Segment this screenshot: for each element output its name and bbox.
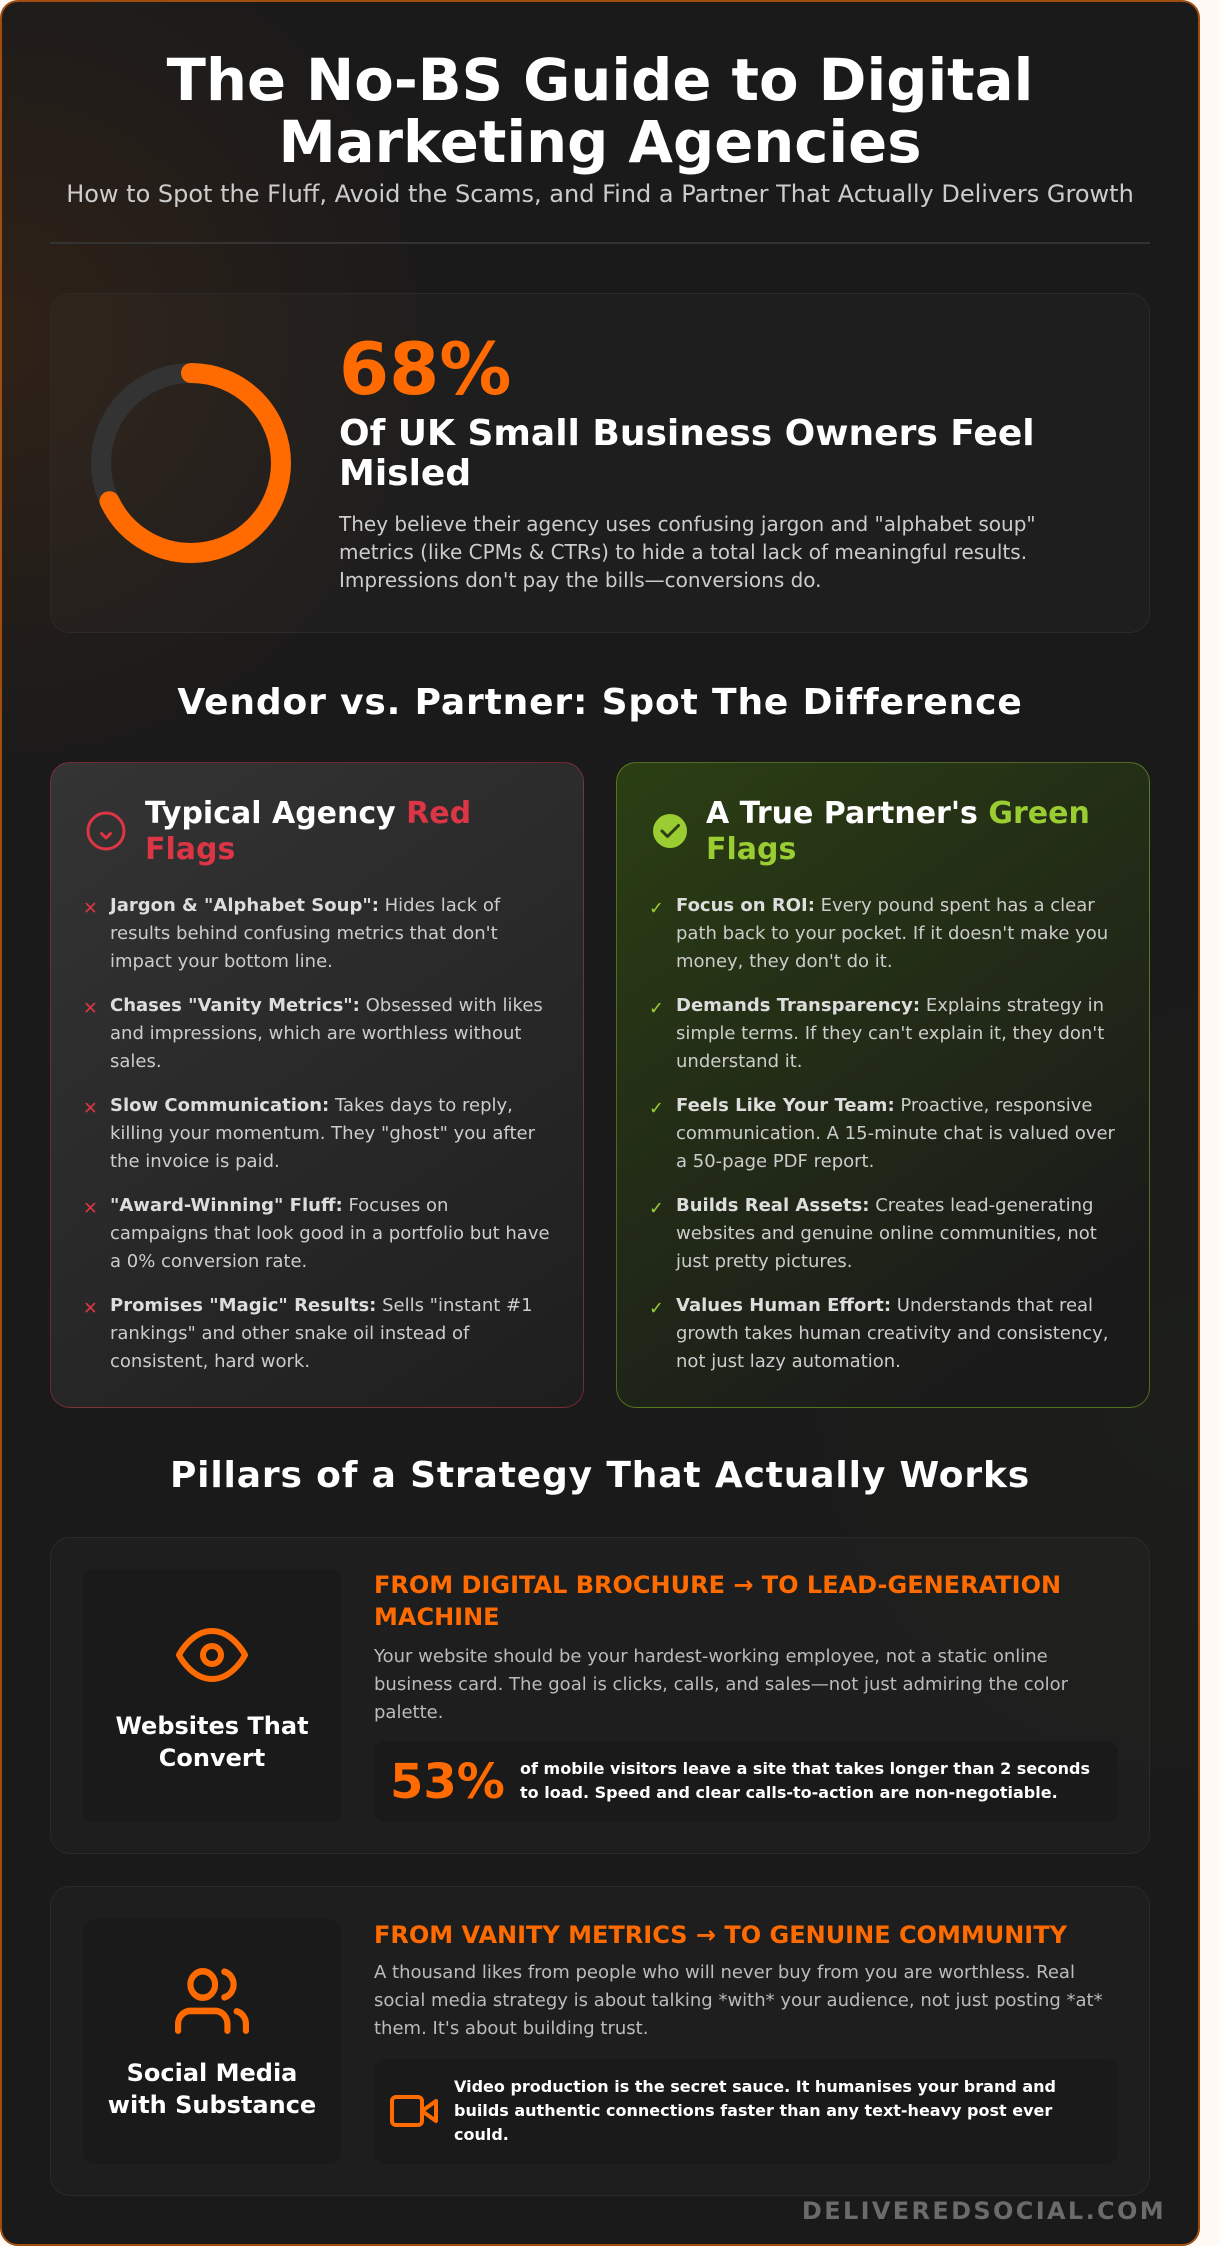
title: [166, 47, 1033, 176]
pillar description: them. It's about building trust.: [374, 2018, 648, 2039]
hero heading: [339, 413, 1035, 494]
pillar description: social media strategy is about talking *with* your audience, not just posting *at*: [374, 1990, 1103, 2011]
label: Social Media: [127, 2059, 297, 2087]
list item: and impressions, which are worthless without: [110, 1023, 521, 1044]
heading: red flags: Flags: [145, 832, 235, 867]
list item: ✓: [649, 899, 664, 919]
stat text: [520, 1759, 1090, 1802]
label: [108, 2059, 316, 2119]
list item: results behind confusing metrics that don't: [110, 923, 498, 944]
pillar description: [374, 1962, 1103, 2039]
heading: red flags: Typical Agency Red: [145, 796, 471, 831]
list item: [649, 1095, 1115, 1172]
list: green flags: [649, 895, 1115, 1372]
list item: [83, 1295, 533, 1372]
list item: Slow Communication: Takes days to reply,: [110, 1095, 513, 1116]
hero heading: Of UK Small Business Owners Feel: [339, 413, 1035, 454]
list item: understand it.: [676, 1051, 803, 1072]
pillar heading: [374, 1571, 1061, 1631]
panel: 68% statistic hero: [50, 293, 1150, 633]
section heading: vendor vs partner: Vendor vs. Partner: Spot The Difference: [177, 682, 1023, 723]
heading: green flags: A True Partner's Green: [706, 796, 1090, 831]
list item: "Award-Winning" Fluff: Focuses on: [110, 1195, 448, 1216]
stat text: to load. Speed and clear calls-to-action are non-negotiable.: [520, 1783, 1058, 1802]
subtitle: How to Spot the Fluff, Avoid the Scams, and Find a Partner That Actually Delivers Growth: [66, 180, 1134, 208]
callout: video production: [374, 2059, 1118, 2164]
list item: Chases "Vanity Metrics": Obsessed with likes: [110, 995, 543, 1016]
list item: a 0% conversion rate.: [110, 1251, 307, 1272]
icon: users: [175, 1968, 249, 2034]
list item: Values Human Effort: Understands that real: [676, 1295, 1093, 1316]
title: The No-BS Guide to Digital: [167, 47, 1033, 114]
list item: websites and genuine online communities, not: [676, 1223, 1097, 1244]
pillar description: Your website should be your hardest-working employee, not a static online: [374, 1646, 1048, 1667]
list item: ✕: [83, 1199, 98, 1219]
label: Websites That: [115, 1712, 309, 1740]
list item: [649, 995, 1104, 1072]
chart: 68% progress ring: [91, 363, 291, 563]
list item: ✕: [83, 1299, 98, 1319]
block: social media with substance: [83, 1919, 341, 2164]
panel: green flags: [616, 762, 1150, 1408]
list: red flags: [83, 895, 550, 1372]
list item: ✓: [649, 1299, 664, 1319]
list item: [83, 1095, 535, 1172]
stat text: of mobile visitors leave a site that takes longer than 2 seconds: [520, 1759, 1090, 1778]
list item: [649, 895, 1108, 972]
heading: red flags: [145, 796, 471, 867]
label: [115, 1712, 309, 1772]
list item: communication. A 15-minute chat is valued over: [676, 1123, 1115, 1144]
callout text: Video production is the secret sauce. It humanises your brand and: [454, 2077, 1056, 2096]
callout text: could.: [454, 2125, 509, 2144]
list item: ✕: [83, 1099, 98, 1119]
pillar description: [374, 1646, 1068, 1723]
list item: sales.: [110, 1051, 162, 1072]
list item: the invoice is paid.: [110, 1151, 280, 1172]
list item: ✕: [83, 899, 98, 919]
callout text: [454, 2077, 1056, 2144]
list item: path back to your pocket. If it doesn't make you: [676, 923, 1108, 944]
list item: Demands Transparency: Explains strategy in: [676, 995, 1104, 1016]
pillar heading: FROM DIGITAL BROCHURE → TO LEAD-GENERATION: [374, 1571, 1061, 1599]
label: Convert: [159, 1744, 265, 1772]
list item: [83, 895, 501, 972]
block: websites that convert: [83, 1569, 341, 1822]
icon: eye: [176, 1628, 248, 1682]
hero description: metrics (like CPMs & CTRs) to hide a total lack of meaningful results.: [339, 540, 1027, 564]
list item: campaigns that look good in a portfolio but have: [110, 1223, 550, 1244]
list item: Jargon & "Alphabet Soup": Hides lack of: [110, 895, 500, 916]
title: Marketing Agencies: [278, 108, 922, 176]
label: with Substance: [108, 2091, 316, 2119]
list item: killing your momentum. They "ghost" you after: [110, 1123, 535, 1144]
pillar heading: MACHINE: [374, 1603, 500, 1631]
pillar description: palette.: [374, 1702, 443, 1723]
list item: ✓: [649, 1199, 664, 1219]
list item: just pretty pictures.: [676, 1251, 853, 1272]
heading: green flags: Flags: [706, 832, 796, 867]
hero description: Impressions don't pay the bills—conversions do.: [339, 568, 822, 592]
list item: [83, 1195, 550, 1272]
panel: websites pillar: [50, 1537, 1150, 1854]
list item: not just lazy automation.: [676, 1351, 901, 1372]
list item: Builds Real Assets: Creates lead-generating: [676, 1195, 1093, 1216]
list item: ✕: [83, 999, 98, 1019]
list item: ✓: [649, 999, 664, 1019]
big number 68%: 68%: [339, 327, 511, 411]
icon: video camera: [390, 2095, 438, 2127]
hero heading: Misled: [339, 453, 471, 494]
list item: [649, 1195, 1097, 1272]
pillar description: business card. The goal is clicks, calls, and sales—not just admiring the color: [374, 1674, 1068, 1695]
callout text: builds authentic connections faster than any text-heavy post ever: [454, 2101, 1052, 2120]
list item: a 50-page PDF report.: [676, 1151, 874, 1172]
panel: red flags: [50, 762, 584, 1408]
list item: Focus on ROI: Every pound spent has a clear: [676, 895, 1095, 916]
heading: green flags: [706, 796, 1090, 867]
footer brand: DELIVEREDSOCIAL.COM: [802, 2197, 1166, 2225]
stat callout: 53%: [374, 1741, 1118, 1822]
list item: Feels Like Your Team: Proactive, responsive: [676, 1095, 1092, 1116]
list item: [649, 1295, 1109, 1372]
list item: growth takes human creativity and consistency,: [676, 1323, 1109, 1344]
hero description: [338, 512, 1036, 592]
list item: simple terms. If they can't explain it, they don't: [676, 1023, 1104, 1044]
list item: impact your bottom line.: [110, 951, 333, 972]
list item: Promises "Magic" Results: Sells "instant #1: [110, 1295, 533, 1316]
icon: frown circle: [86, 812, 126, 850]
panel: social media pillar: [50, 1886, 1150, 2196]
list item: money, they don't do it.: [676, 951, 893, 972]
list item: consistent, hard work.: [110, 1351, 310, 1372]
pillar heading: FROM VANITY METRICS → TO GENUINE COMMUNITY: [374, 1921, 1067, 1949]
pillar description: A thousand likes from people who will never buy from you are worthless. Real: [374, 1962, 1075, 1983]
list item: ✓: [649, 1099, 664, 1119]
section heading: pillars: Pillars of a Strategy That Actually Works: [170, 1455, 1030, 1496]
hero description: They believe their agency uses confusing jargon and "alphabet soup": [339, 512, 1036, 536]
list item: [83, 995, 543, 1072]
number 53%: 53%: [390, 1754, 505, 1810]
list item: rankings" and other snake oil instead of: [110, 1323, 469, 1344]
icon: check circle: [653, 814, 687, 848]
